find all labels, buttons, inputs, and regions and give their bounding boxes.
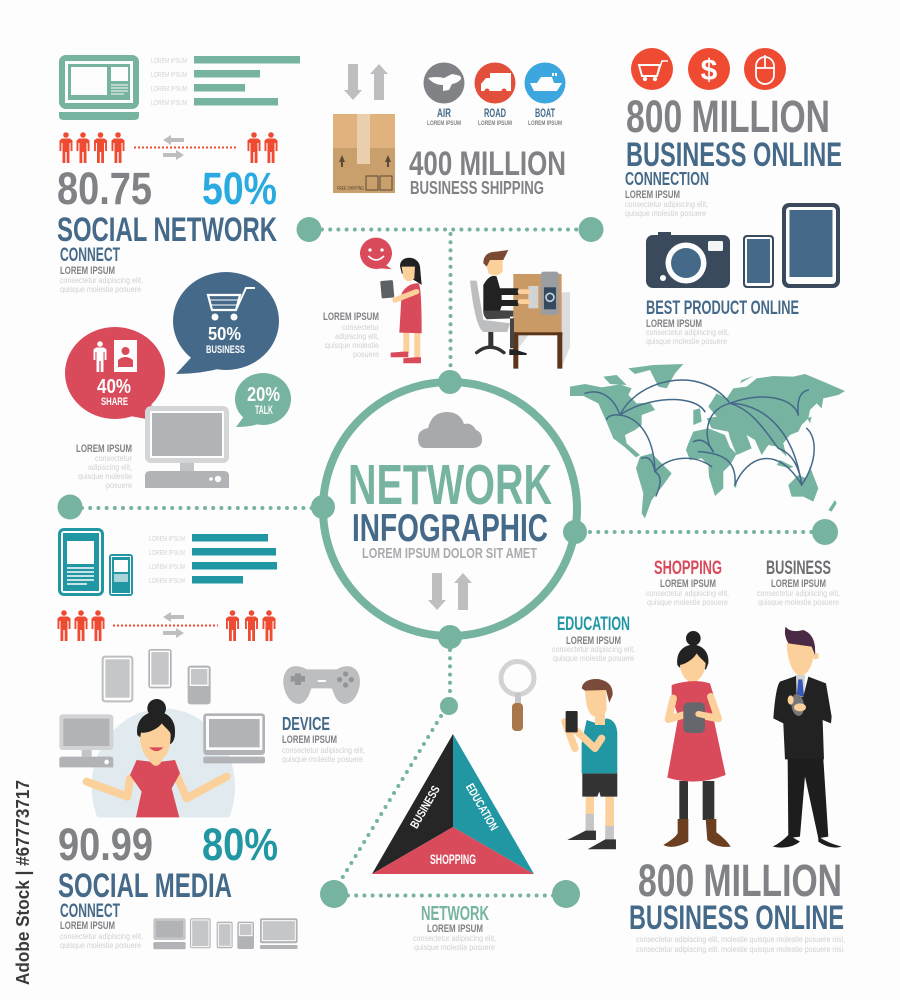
- heading: social media: SOCIAL MEDIA: [58, 867, 232, 905]
- bar chart: green bars: [151, 56, 300, 107]
- bar chart: teal bars: LOREM IPSUM: [149, 564, 185, 571]
- text block: connect lower: CONNECT: [60, 901, 120, 922]
- triangle chart: SHOPPING: [430, 851, 476, 867]
- text block: best product online: BEST PRODUCT ONLINE: [646, 298, 799, 319]
- text block: shopping: quisque molestie posuere: [647, 598, 728, 607]
- icon: camera: [646, 232, 730, 288]
- icon: magnifier: [501, 662, 534, 731]
- text block: bottom note: consectetur adipiscing elit, molestie quisque molestie posuere nisi,: [636, 935, 845, 944]
- bar chart: teal bars: LOREM IPSUM: [149, 550, 185, 557]
- text block: connect: [60, 245, 143, 294]
- bar chart: green bars: LOREM IPSUM: [151, 72, 187, 79]
- text block: lorem ipsum girl: consectetur: [342, 323, 379, 332]
- triangle chart: [372, 734, 534, 874]
- text block: best product online: consectetur adipiscing elit,: [646, 328, 729, 337]
- figure: woman with tablet: [663, 631, 731, 847]
- panel: social network: [57, 55, 300, 294]
- icon: road: [474, 62, 516, 104]
- text block: network: quisque molestie posuere: [414, 943, 495, 952]
- bar chart: green bars: LOREM IPSUM: [151, 100, 187, 107]
- text block: network: consectetur adipiscing elit,: [413, 934, 496, 943]
- text block: network: LOREM IPSUM: [427, 923, 483, 935]
- icon: desktop computer: [145, 406, 229, 488]
- text block: lorem ipsum computer: [76, 443, 132, 490]
- icon: smile bubble: [360, 238, 392, 269]
- text block: shopping: LOREM IPSUM: [660, 578, 716, 590]
- routes: [585, 380, 814, 496]
- illustration: man at desk: [470, 250, 570, 369]
- text block: business: consectetur adipiscing elit,: [757, 589, 840, 598]
- map: continents: [570, 364, 845, 518]
- text block: connect: CONNECT: [60, 245, 120, 266]
- network connector lines and nodes: [58, 217, 838, 908]
- text block: device: LOREM IPSUM: [282, 734, 337, 746]
- text block: business: [757, 558, 840, 607]
- icon: cart: [631, 48, 673, 90]
- text block: business: BUSINESS: [766, 558, 831, 579]
- icon: cardboard box: [333, 114, 395, 193]
- bar chart: teal bars: LOREM IPSUM: [149, 536, 185, 543]
- text block: bottom note: consectetur adipiscing elit, molestie quisque molestie posuere nisi,: [636, 945, 845, 954]
- text block: device: consectetur adipiscing elit,: [282, 746, 365, 755]
- icon: dollar: $: [701, 54, 718, 87]
- text block: connect: quisque molestie posuere: [60, 285, 141, 294]
- illustration: girl with tablet: [360, 238, 422, 363]
- stock credit: Adobe Stock | #67773717: [13, 780, 33, 985]
- icon: people exchange lower: [58, 610, 276, 641]
- text block: connection: [625, 169, 709, 218]
- text block: education: [552, 614, 635, 663]
- text block: lorem ipsum girl: adipiscing elit,: [335, 332, 379, 341]
- panel: central network circle: [311, 370, 587, 649]
- callout: 20% talk: 20%: [247, 384, 280, 406]
- icon: mini device row: [153, 918, 298, 949]
- icon: cloud: [418, 412, 482, 448]
- text block: lorem ipsum girl: [323, 311, 379, 359]
- text block: education: EDUCATION: [557, 614, 630, 635]
- panel: social media: [58, 819, 298, 950]
- panel: business online top right: [625, 48, 842, 346]
- callout: 40% share: [65, 327, 165, 422]
- icon: phone teal: [109, 554, 133, 596]
- figure: boy with phone: [565, 679, 617, 849]
- icon: up down arrows: [344, 64, 388, 100]
- triangle chart: BUSINESS: [407, 783, 443, 831]
- text block: lorem ipsum computer: LOREM IPSUM: [76, 443, 132, 455]
- text block: shopping: consectetur adipiscing elit,: [646, 589, 729, 598]
- text block: connection: LOREM IPSUM: [625, 189, 680, 201]
- text block: bottom note: [636, 935, 845, 954]
- bar chart: green bars: LOREM IPSUM: [151, 86, 187, 93]
- icon: boat: [524, 62, 566, 104]
- text block: lorem ipsum computer: adipiscing elit,: [88, 463, 132, 472]
- text block: best product online: [646, 298, 799, 346]
- bar chart: green bars: LOREM IPSUM: [151, 58, 187, 65]
- icon: phone: [743, 235, 774, 288]
- panel: business online bottom: [629, 855, 845, 954]
- subtitle: LOREM IPSUM DOLOR SIT AMET: [362, 545, 537, 562]
- heading: 800 million: 800 MILLION: [626, 91, 830, 142]
- text block: device: quisque molestie posuere: [282, 755, 363, 764]
- background circle: [92, 708, 235, 817]
- icon: tablet gray: [102, 656, 133, 702]
- title: infographic: INFOGRAPHIC: [352, 507, 548, 550]
- text block: connect: LOREM IPSUM: [60, 265, 115, 277]
- labels: air road boat: LOREM IPSUM: [528, 120, 562, 127]
- callout: 20% talk: [235, 373, 291, 427]
- text block: education: LOREM IPSUM: [566, 635, 621, 647]
- text block: connect: consectetur adipiscing elit,: [60, 276, 143, 285]
- text block: connect lower: LOREM IPSUM: [60, 920, 115, 932]
- callout: 40% share: 40%: [97, 376, 131, 398]
- text block: connect lower: consectetur adipiscing elit,: [60, 932, 143, 941]
- text block: network: NETWORK: [421, 903, 489, 925]
- icon: people exchange: [60, 132, 278, 163]
- text block: lorem ipsum girl: posuere: [353, 350, 379, 359]
- text block: device: [282, 714, 365, 764]
- icon: laptop gray: [203, 713, 265, 763]
- callout: 50% business: BUSINESS: [206, 344, 245, 356]
- stat: 80%: 80%: [202, 819, 278, 870]
- labels: air road boat: [427, 106, 562, 127]
- text block: connection: consectetur adipiscing elit,: [625, 200, 708, 209]
- icon: mobile gray: [188, 666, 211, 704]
- stat: 90.99: 90.99: [58, 819, 153, 870]
- subheading: business shipping: BUSINESS SHIPPING: [410, 178, 544, 198]
- callout: 20% talk: TALK: [255, 403, 273, 417]
- figure: man in suit: [773, 627, 842, 848]
- icon: mouse: [744, 48, 786, 90]
- text block: lorem ipsum computer: quisque molestie: [78, 472, 132, 481]
- illustration: woman with devices: [59, 649, 265, 817]
- text block: lorem ipsum girl: LOREM IPSUM: [323, 311, 379, 323]
- icon: tablet: [782, 203, 840, 288]
- labels: air road boat: ROAD: [484, 106, 506, 120]
- icon: phone gray: [148, 649, 172, 688]
- text block: connect lower: [60, 901, 143, 950]
- callout: 50% business: 50%: [208, 324, 241, 344]
- labels: air road boat: LOREM IPSUM: [427, 120, 461, 127]
- figure: woman: [87, 699, 227, 817]
- panel: shipping: [333, 62, 566, 198]
- labels: air road boat: LOREM IPSUM: [478, 120, 512, 127]
- panel: bubbles: [65, 272, 291, 490]
- icon: game controller: [283, 666, 360, 704]
- triangle chart: EDUCATION: [463, 781, 501, 833]
- icon: laptop: [59, 55, 139, 120]
- callout: 40% share: SHARE: [101, 396, 128, 408]
- stat: 80.75: 80.75: [57, 163, 152, 214]
- text block: connection: quisque molestie posuere: [625, 209, 706, 218]
- text block: connection: CONNECTION: [625, 169, 709, 189]
- text block: education: quisque molestie posuere: [553, 654, 634, 663]
- icon: cardboard box: FREE SHIPPING: [337, 186, 364, 192]
- text block: network: [413, 903, 496, 952]
- text block: business: LOREM IPSUM: [771, 578, 826, 590]
- world map with routes: [570, 364, 845, 518]
- text block: lorem ipsum computer: consectetur: [95, 454, 132, 463]
- text block: shopping: [646, 558, 729, 607]
- heading: social network: SOCIAL NETWORK: [57, 211, 277, 249]
- icon: up down arrows center: [428, 573, 472, 610]
- text block: best product online: quisque molestie posuere: [646, 337, 727, 346]
- text block: lorem ipsum computer: posuere: [106, 481, 132, 490]
- icon: dollar: [688, 48, 730, 90]
- heading: 400 million: 400 MILLION: [409, 145, 566, 183]
- text block: lorem ipsum girl: quisque molestie: [325, 341, 379, 350]
- text block: device: DEVICE: [282, 714, 330, 734]
- icon: air: [424, 62, 464, 104]
- labels: air road boat: BOAT: [535, 106, 555, 120]
- panel: device text and controller: [282, 666, 365, 764]
- callout: 50% business: [173, 272, 279, 374]
- icon: monitor gray: [59, 714, 113, 767]
- text block: best product online: LOREM IPSUM: [646, 318, 702, 330]
- text block: shopping: SHOPPING: [654, 558, 722, 579]
- panel: devices stats: [58, 528, 277, 641]
- labels: air road boat: AIR: [437, 106, 451, 120]
- text block: business: quisque molestie posuere: [758, 598, 839, 607]
- ring: [311, 370, 587, 649]
- bar chart: teal bars: [149, 534, 277, 585]
- title: network: NETWORK: [348, 453, 552, 517]
- bar chart: teal bars: LOREM IPSUM: [149, 578, 185, 585]
- text block: education: consectetur adipiscing elit,: [552, 645, 635, 654]
- text block: connect lower: quisque molestie posuere: [60, 941, 141, 950]
- icon: tablet teal: [58, 528, 104, 596]
- stat: 50%: 50%: [202, 163, 277, 214]
